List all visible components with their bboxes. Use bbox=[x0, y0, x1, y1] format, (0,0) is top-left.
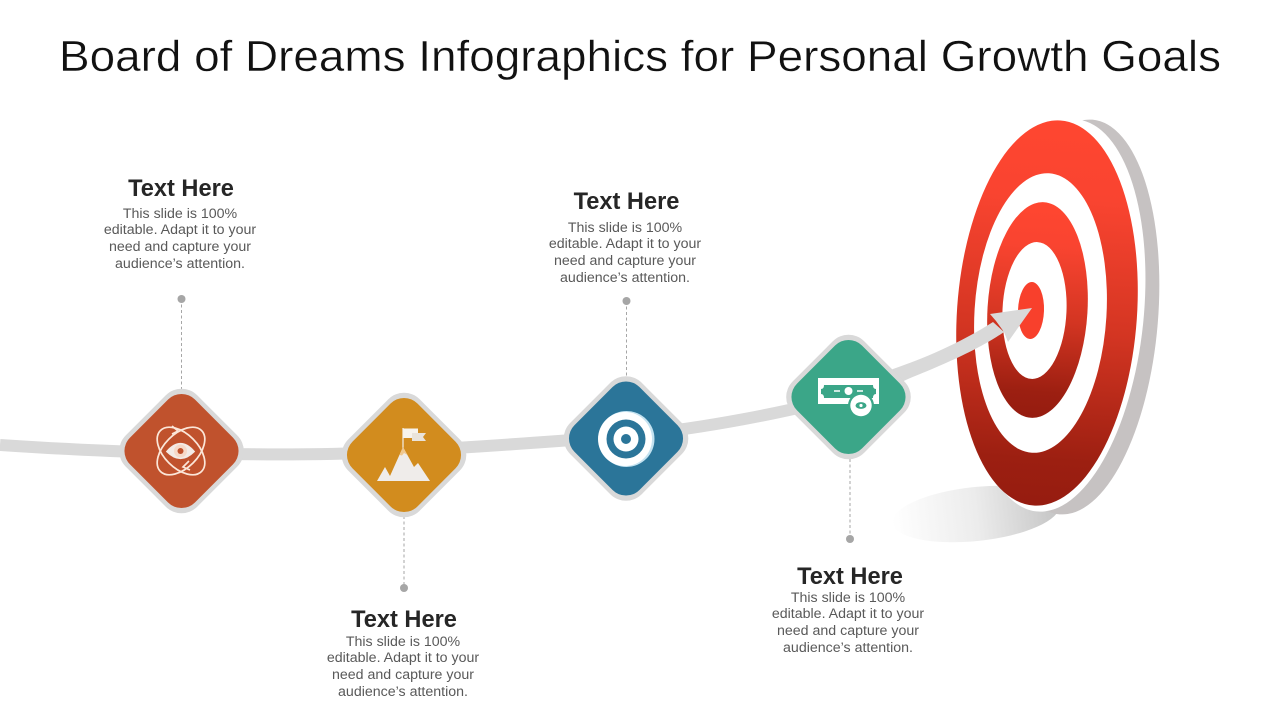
step 2 bbox=[327, 384, 479, 700]
step 3 text: Text Here bbox=[574, 189, 679, 215]
step 3 text: This slide is 100% bbox=[568, 220, 683, 236]
step 3 connector bbox=[622, 297, 630, 378]
step 4 bbox=[772, 326, 924, 656]
step 2 connector bbox=[400, 516, 408, 592]
growth arrow bbox=[0, 308, 1032, 454]
step 2 text: Text Here bbox=[351, 607, 457, 633]
step 2 text: need and capture your bbox=[332, 667, 474, 683]
step 4 text: Text Here bbox=[797, 564, 903, 590]
step 1 diamond bbox=[110, 380, 253, 522]
icon: mountain with flag bbox=[377, 428, 430, 481]
step 2 text bbox=[327, 607, 479, 700]
step 1 text bbox=[104, 176, 256, 272]
step 1 bbox=[104, 176, 256, 522]
step 2 text: audience’s attention. bbox=[338, 684, 468, 700]
step 1 text: need and capture your bbox=[109, 239, 251, 255]
target rings bbox=[944, 114, 1150, 512]
step 2 text: This slide is 100% bbox=[346, 634, 461, 650]
step 3 text bbox=[549, 189, 701, 286]
title: Board of Dreams Infographics for Personal Growth Goals bbox=[59, 32, 1221, 81]
step 4 text: This slide is 100% bbox=[791, 590, 906, 606]
step 3 bbox=[549, 189, 701, 510]
step 1 connector bbox=[178, 295, 186, 390]
step 1 text: Text Here bbox=[128, 176, 234, 202]
step 3 text: editable. Adapt it to your bbox=[549, 236, 701, 252]
step 2 diamond bbox=[333, 384, 475, 526]
target ground shadow bbox=[890, 478, 1062, 550]
step 4 text: audience’s attention. bbox=[783, 640, 913, 656]
step 1 text: This slide is 100% bbox=[123, 206, 238, 222]
step 4 connector bbox=[846, 459, 854, 543]
target side edge bbox=[978, 113, 1174, 521]
step 1 text: audience’s attention. bbox=[115, 256, 245, 272]
step 3 diamond bbox=[555, 367, 697, 510]
step 3 text: audience’s attention. bbox=[560, 270, 690, 286]
icon: bullseye bbox=[598, 411, 654, 467]
target white rim bbox=[950, 111, 1164, 520]
step 4 diamond bbox=[777, 326, 920, 468]
step 2 text: editable. Adapt it to your bbox=[327, 650, 479, 666]
step 3 text: need and capture your bbox=[554, 253, 696, 269]
step 4 text: need and capture your bbox=[777, 623, 919, 639]
icon: eye with orbits bbox=[148, 418, 214, 484]
step 1 text: editable. Adapt it to your bbox=[104, 222, 256, 238]
step 4 text: editable. Adapt it to your bbox=[772, 606, 924, 622]
icon: banknote with eye bbox=[818, 378, 879, 418]
step 4 text bbox=[772, 564, 924, 656]
target board bbox=[890, 111, 1174, 550]
